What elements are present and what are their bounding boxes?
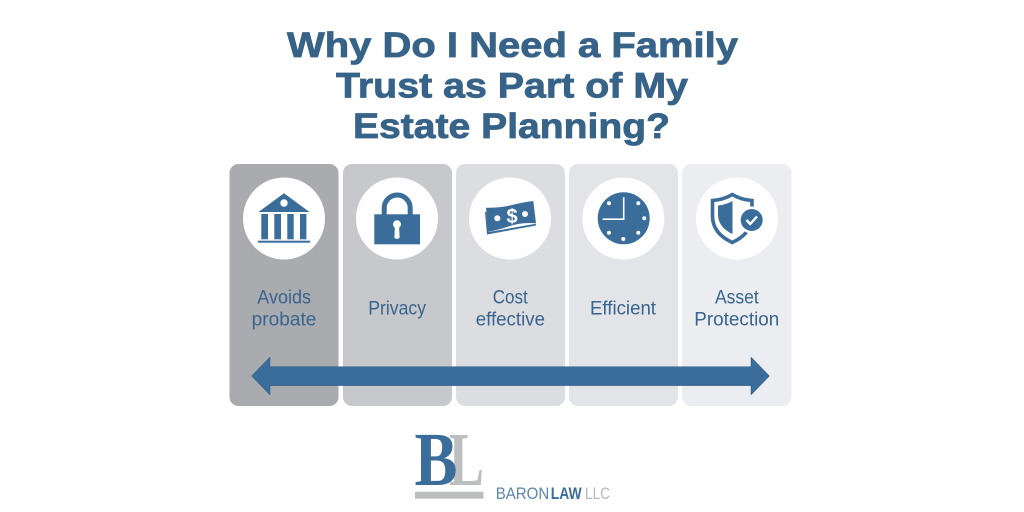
label: asset protection [694, 288, 779, 330]
logo wordmark [496, 485, 610, 503]
title: Why Do I Need a Family [287, 25, 738, 65]
label: cost effective: effective [476, 310, 545, 330]
label: avoids probate: probate [252, 310, 316, 330]
panel: cost effective [456, 164, 565, 406]
label: cost effective [476, 288, 545, 330]
title [287, 25, 738, 146]
icon: shield with check [712, 194, 765, 242]
icon: banknotes [485, 201, 536, 234]
label: efficient: Efficient [590, 298, 657, 320]
logo wordmark: BARON [496, 485, 549, 503]
icon: clock [598, 192, 650, 244]
label: asset protection: Protection [694, 310, 779, 330]
label: avoids probate: Avoids [257, 288, 311, 308]
label: avoids probate [252, 288, 316, 330]
label: cost effective: Cost [493, 288, 528, 308]
logo wordmark: LLC [585, 485, 610, 503]
logo: Baron Law LLC [414, 418, 610, 503]
logo mark: BL monogram: L [449, 418, 484, 502]
panel: efficient [569, 164, 678, 406]
panel: avoids probate [230, 164, 338, 406]
logo wordmark: LAW [551, 485, 582, 503]
panel: asset protection [682, 164, 792, 406]
panel: privacy [343, 164, 452, 406]
arrow: double-headed [252, 357, 770, 395]
label: asset protection: Asset [715, 288, 759, 308]
title: Trust as Part of My [336, 66, 688, 106]
logo mark: BL monogram: B [414, 418, 458, 502]
icon: banknotes: $ [506, 206, 518, 228]
title: Estate Planning? [353, 106, 670, 146]
icon: padlock [374, 195, 420, 244]
icon: bank [258, 193, 310, 243]
label: privacy: Privacy [368, 298, 426, 320]
